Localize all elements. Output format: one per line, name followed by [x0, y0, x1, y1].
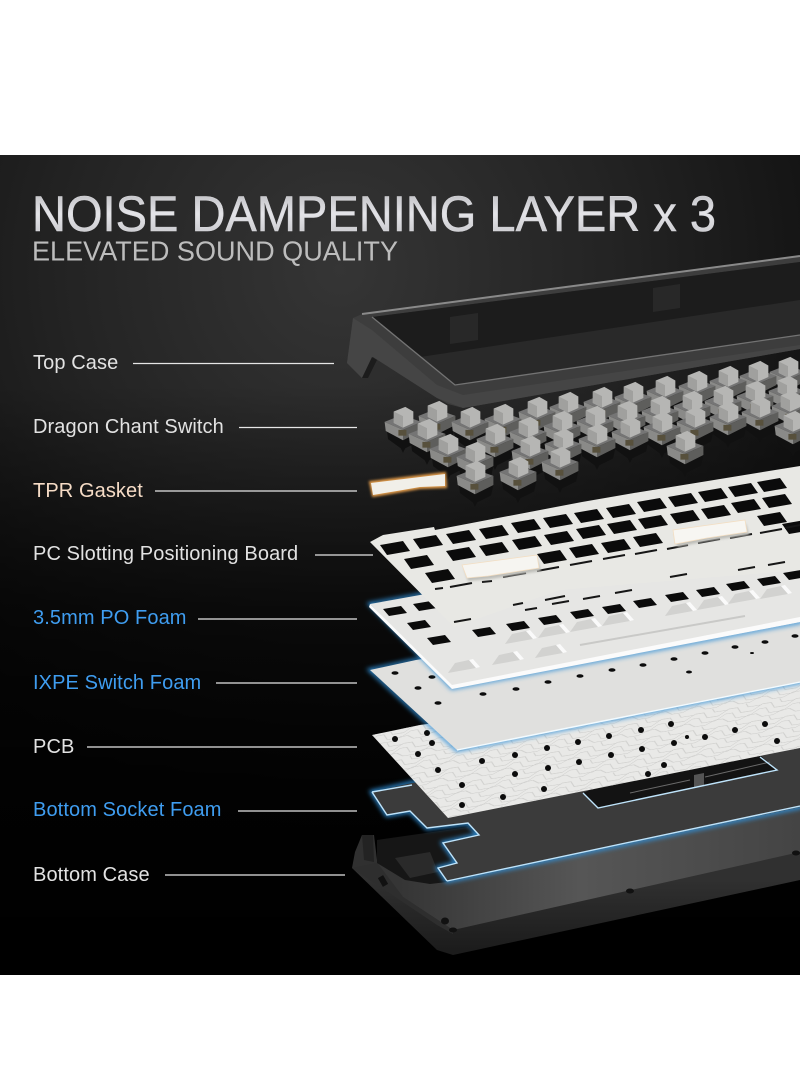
label: Dragon Chant Switch: Dragon Chant Switch	[33, 416, 224, 438]
label: 3.5mm PO Foam: 3.5mm PO Foam	[33, 607, 187, 629]
layer: IXPE switch foam	[370, 598, 800, 750]
exploded keyboard illustration	[347, 256, 800, 955]
label: Top Case: Top Case	[33, 352, 118, 374]
title: NOISE DAMPENING LAYER x 3	[32, 186, 716, 242]
label: Bottom Case: Bottom Case	[33, 864, 150, 886]
label: PCB: PCB	[33, 736, 74, 758]
layer: TPR gasket	[370, 473, 446, 496]
layer: bottom socket foam	[372, 730, 800, 881]
label: PC Slotting Positioning Board: PC Slotting Positioning Board	[33, 543, 298, 565]
layer: PC slotting positioning board	[370, 466, 800, 627]
layer: 3.5mm PO foam	[369, 530, 800, 689]
layer: Dragon Chant switches	[385, 357, 800, 507]
layer: PCB	[372, 672, 800, 818]
subtitle: ELEVATED SOUND QUALITY	[32, 236, 398, 266]
keyboard gaskets on plate	[462, 520, 749, 581]
label: Bottom Socket Foam: Bottom Socket Foam	[33, 799, 222, 821]
layer: top case	[347, 256, 800, 408]
layer: bottom case	[352, 760, 800, 955]
label: IXPE Switch Foam: IXPE Switch Foam	[33, 672, 201, 694]
label: TPR Gasket: TPR Gasket	[33, 480, 143, 502]
